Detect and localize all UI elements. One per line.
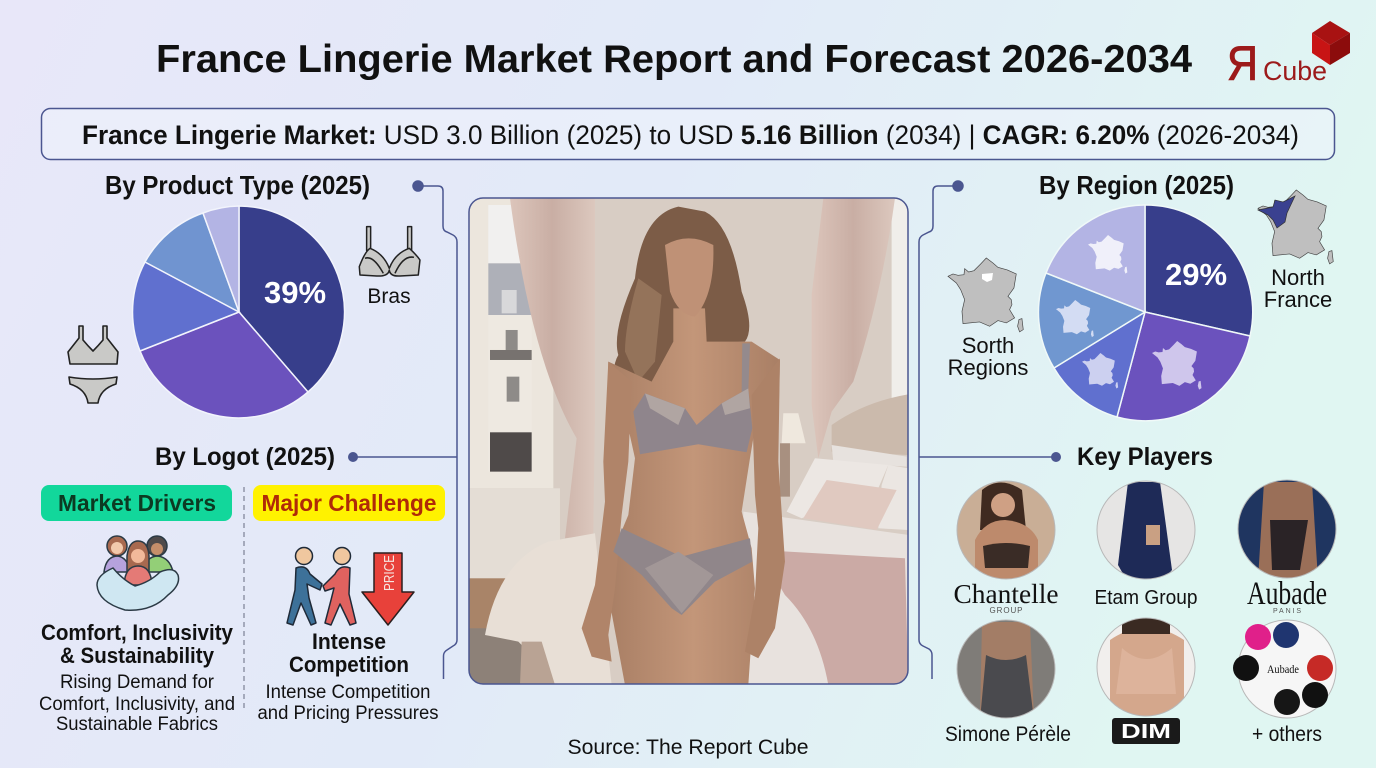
pill: major challenge: Major Challenge	[262, 490, 436, 516]
key player: aubade	[1238, 480, 1336, 615]
icon: diverse people with soft cloud	[97, 536, 179, 610]
key player: others	[1233, 620, 1336, 718]
pie chart: region	[1038, 205, 1253, 421]
text: comfort driver: Comfort, Inclusivity, and	[39, 694, 235, 715]
label: south regions: Sorth	[962, 333, 1014, 358]
title: France Lingerie Market Report and Forecast 2026-2034	[156, 38, 1192, 81]
key player: dim	[1097, 618, 1195, 744]
connector: region to photo	[919, 181, 963, 679]
text: comfort driver	[39, 620, 235, 735]
text: competition challenge	[258, 629, 438, 724]
key player: others: Aubade	[1267, 662, 1299, 676]
key player: dim: DIM	[1121, 721, 1171, 743]
logo: RCube	[1227, 21, 1350, 91]
logo: RCube: Я	[1227, 38, 1258, 91]
pill: market drivers: Market Drivers	[58, 490, 216, 516]
bed and throw	[485, 512, 908, 685]
icon: competition and falling price: PRICE	[381, 555, 398, 591]
pie chart: product type: 39%	[264, 275, 326, 310]
pill: major challenge	[253, 485, 445, 521]
market summary banner: France Lingerie Market: USD 3.0 Billion (2025) to USD 5.16 Billion (2034) | CAGR: 6.20% (2026-2034)	[82, 120, 1299, 150]
pie chart: region: 29%	[1165, 257, 1227, 292]
heading: by region: By Region (2025)	[1039, 170, 1234, 200]
connector: logot to photo	[348, 452, 457, 462]
label: north france: North	[1271, 265, 1325, 290]
heading: by product type: By Product Type (2025)	[105, 170, 370, 200]
text: comfort driver: Comfort, Inclusivity	[41, 620, 234, 645]
pillows	[787, 445, 908, 530]
right window	[892, 198, 908, 398]
label: south regions	[948, 333, 1028, 380]
icon: bra	[359, 227, 420, 276]
left curtain	[510, 198, 595, 538]
text: competition challenge: Intense Competition	[266, 682, 430, 703]
headboard	[832, 394, 908, 455]
key player: chantelle: GROUP	[990, 606, 1022, 615]
map: north france	[1258, 190, 1333, 264]
text: comfort driver: & Sustainability	[60, 643, 215, 668]
key player: chantelle: Chantelle	[954, 579, 1059, 609]
key player: simone perele: Simone Pérèle	[945, 723, 1071, 746]
text: comfort driver: Sustainable Fabrics	[56, 714, 218, 735]
model figure (simplified)	[582, 207, 785, 685]
wainscot and floor	[468, 488, 560, 582]
key player: aubade: PANIS	[1273, 608, 1301, 615]
label: others: + others	[1252, 723, 1322, 746]
icon: bralette and briefs	[68, 326, 118, 403]
label: north france: France	[1264, 287, 1332, 312]
lamp	[780, 413, 806, 497]
icon: competition and falling price	[287, 548, 414, 625]
text: competition challenge: and Pricing Pressures	[258, 703, 438, 724]
key player: etam group	[1094, 481, 1198, 609]
text: competition challenge: Competition	[289, 652, 409, 677]
heading: key players: Key Players	[1077, 443, 1213, 471]
label: north france	[1264, 265, 1332, 312]
source: Source: The Report Cube	[568, 736, 808, 759]
connector: key players to photo	[919, 452, 1061, 462]
right curtain	[812, 198, 895, 458]
heading: by logot: By Logot (2025)	[155, 443, 335, 471]
key player: chantelle	[954, 481, 1059, 615]
divider	[243, 487, 245, 712]
logo: RCube: Cube	[1263, 56, 1327, 86]
pie chart: product type	[133, 206, 344, 418]
text: comfort driver: Rising Demand for	[60, 672, 215, 693]
window and view	[468, 198, 553, 488]
pill: market drivers	[41, 485, 232, 521]
text: competition challenge: Intense	[312, 629, 386, 654]
key player: simone perele	[945, 620, 1071, 746]
map: south regions	[948, 258, 1023, 332]
connector: product type to photo	[413, 181, 457, 679]
label: bras: Bras	[367, 285, 411, 308]
market summary banner	[42, 108, 1334, 160]
central photo panel: model in bedroom	[465, 195, 912, 685]
key player: etam group: Etam Group	[1094, 587, 1198, 609]
label: south regions: Regions	[948, 355, 1028, 380]
key player: aubade: Aubade	[1247, 576, 1327, 612]
